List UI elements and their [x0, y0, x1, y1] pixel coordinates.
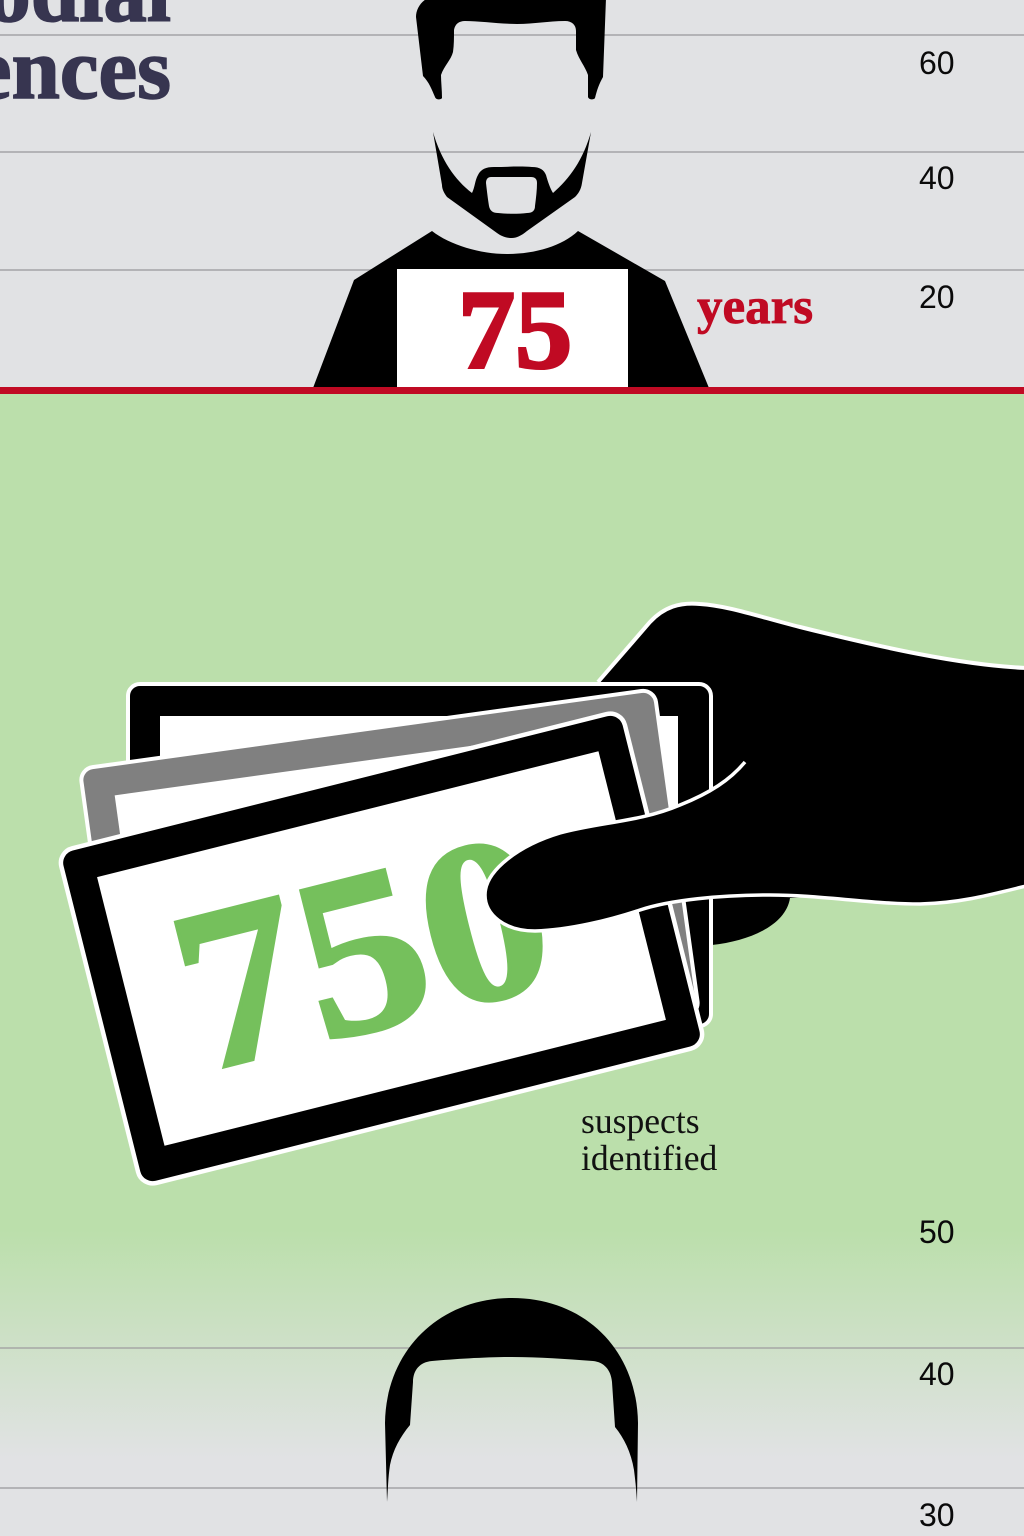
- red divider bar: [0, 387, 1024, 394]
- icon: hand holding banknotes: [58, 604, 1024, 1187]
- scale numbers: upper: 20: [919, 279, 955, 315]
- number: 750 suspects: 750: [149, 782, 576, 1122]
- label: years: years: [697, 279, 813, 335]
- label: suspects identified: suspects: [581, 1101, 700, 1141]
- scale numbers: upper: [919, 45, 955, 315]
- sign: prison term: [397, 268, 628, 392]
- sign: prison term: 75: [458, 268, 572, 392]
- label: suspects identified: identified: [581, 1138, 718, 1178]
- scale numbers: lower: [919, 1214, 955, 1533]
- icon: man's hair: [385, 1298, 638, 1502]
- scale numbers: lower: 40: [919, 1356, 955, 1392]
- panel: green suspects background: [0, 394, 1024, 1480]
- banknote: middle grey: [80, 689, 699, 1094]
- scale numbers: upper: 60: [919, 45, 955, 81]
- scale numbers: lower: 30: [919, 1497, 955, 1533]
- scale numbers: lower: 50: [919, 1214, 955, 1250]
- icon: bearded man: [416, 0, 606, 238]
- hand: palm behind notes: [598, 604, 1024, 945]
- scale numbers: upper: 40: [919, 160, 955, 196]
- banknote: back: [128, 684, 711, 1026]
- label: suspects identified: [581, 1101, 718, 1178]
- hand: thumb over notes: [485, 740, 1024, 931]
- icon: man's shoulders: [313, 231, 709, 388]
- banknote: front: [58, 710, 705, 1187]
